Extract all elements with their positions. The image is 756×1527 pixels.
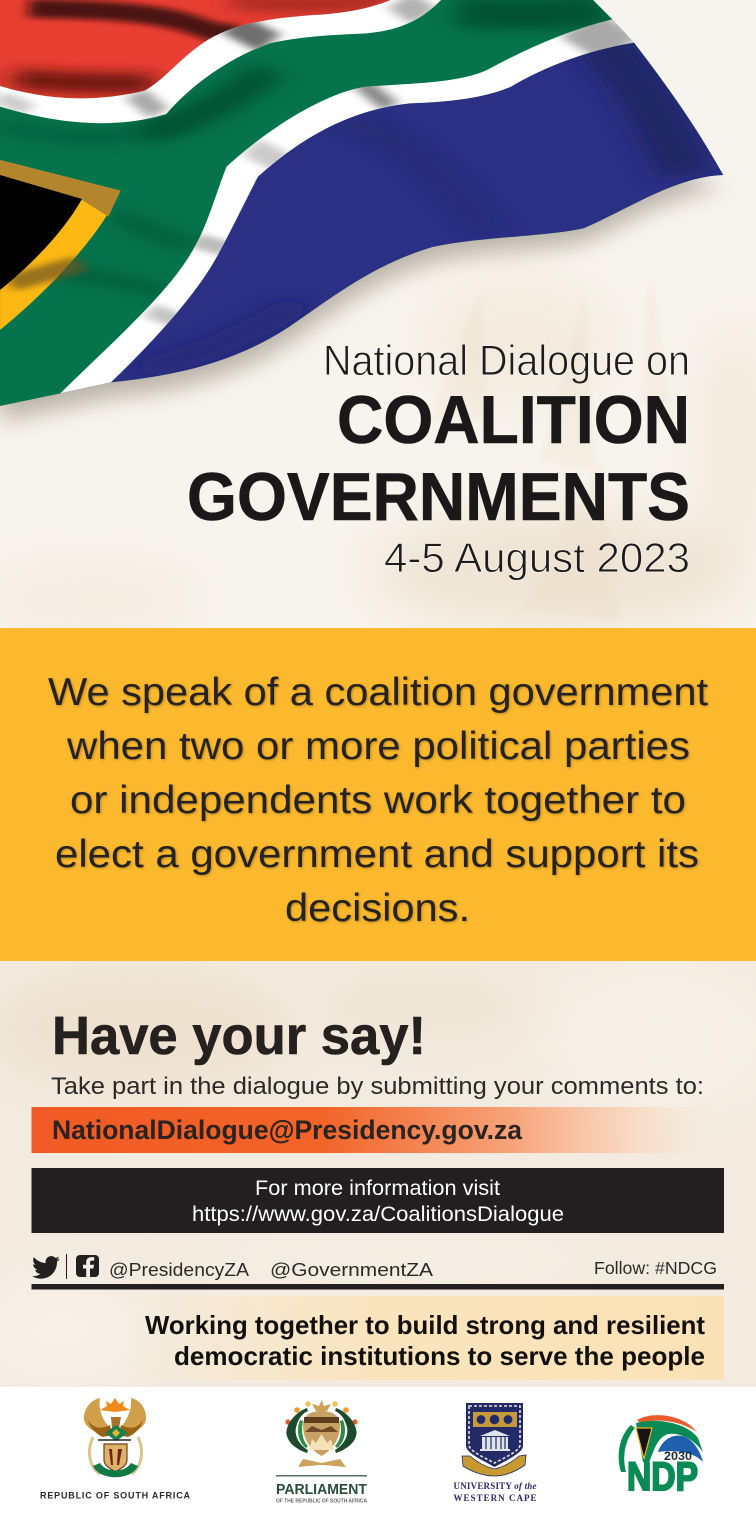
icon: twitter bird [32, 1256, 60, 1279]
upper white stripe [0, 0, 441, 123]
sublabel: WESTERN CAPE [454, 1493, 536, 1503]
callout: email band [32, 1107, 722, 1153]
text: government handle: @GovernmentZA [270, 1260, 433, 1280]
logo: Republic of South Africa coat of arms [40, 1398, 190, 1500]
text block: coalition definition: decisions. [285, 887, 470, 930]
panel: more information [32, 1168, 724, 1233]
text block: coalition definition: elect a government and support its [55, 833, 699, 876]
heading: COALITION: COALITION [337, 382, 690, 458]
label NDP: NDP [627, 1455, 698, 1499]
text block: coalition definition: We speak of a coalition government [48, 671, 708, 714]
text block: coalition definition: or independents work together to [70, 779, 686, 822]
green field [0, 0, 756, 420]
gold chevron [0, 160, 121, 330]
panel: logo footer [0, 1387, 756, 1527]
flag shadow [0, 167, 723, 421]
sublabel: OF THE REPUBLIC OF SOUTH AFRICA [276, 1498, 367, 1504]
background: parchment top [52, 292, 756, 628]
heading: National Dialogue on: National Dialogue on [323, 337, 690, 385]
background: parchment bottom [0, 961, 756, 1387]
heading: date: 4-5 August 2023 [384, 534, 690, 581]
logo: Parliament of the Republic of South Africa [276, 1400, 367, 1504]
text: presidency handle: @PresidencyZA [109, 1260, 249, 1280]
black chevron [0, 175, 82, 290]
icon: facebook [76, 1255, 99, 1277]
text: take part: Take part in the dialogue by submitting your comments to: [51, 1073, 704, 1100]
label 2030: 2030 [664, 1451, 692, 1463]
text block: coalition definition: when two or more political parties [66, 725, 690, 768]
blue field [111, 43, 723, 382]
text: follow hashtag: Follow: #NDCG [594, 1258, 717, 1278]
red band [0, 0, 391, 98]
heading: Have your say!: Have your say! [52, 1006, 426, 1066]
callout: tagline band: democratic institutions to serve the people [174, 1341, 705, 1371]
flag: South African flag waving from the top-left corner [0, 0, 724, 430]
callout: tagline band: Working together to build strong and resilient [145, 1310, 705, 1340]
text block: coalition definition [48, 671, 708, 930]
panel: more information: https://www.gov.za/CoalitionsDialogue [192, 1203, 564, 1226]
label: REPUBLIC OF SOUTH AFRICA [40, 1490, 190, 1500]
callout: tagline band [120, 1296, 724, 1380]
logo: NDP 2030 [619, 1415, 703, 1499]
panel: more information: For more information visit [255, 1177, 500, 1200]
heading: GOVERNMENTS: GOVERNMENTS [187, 459, 690, 535]
logo: University of the Western Cape [454, 1403, 536, 1503]
panel: yellow definition band [0, 628, 756, 961]
lower white stripe [60, 19, 634, 393]
callout: email band: NationalDialogue@Presidency.gov.za [52, 1115, 523, 1145]
label: UNIVERSITY of the [454, 1481, 536, 1491]
label: PARLIAMENT [276, 1482, 367, 1498]
